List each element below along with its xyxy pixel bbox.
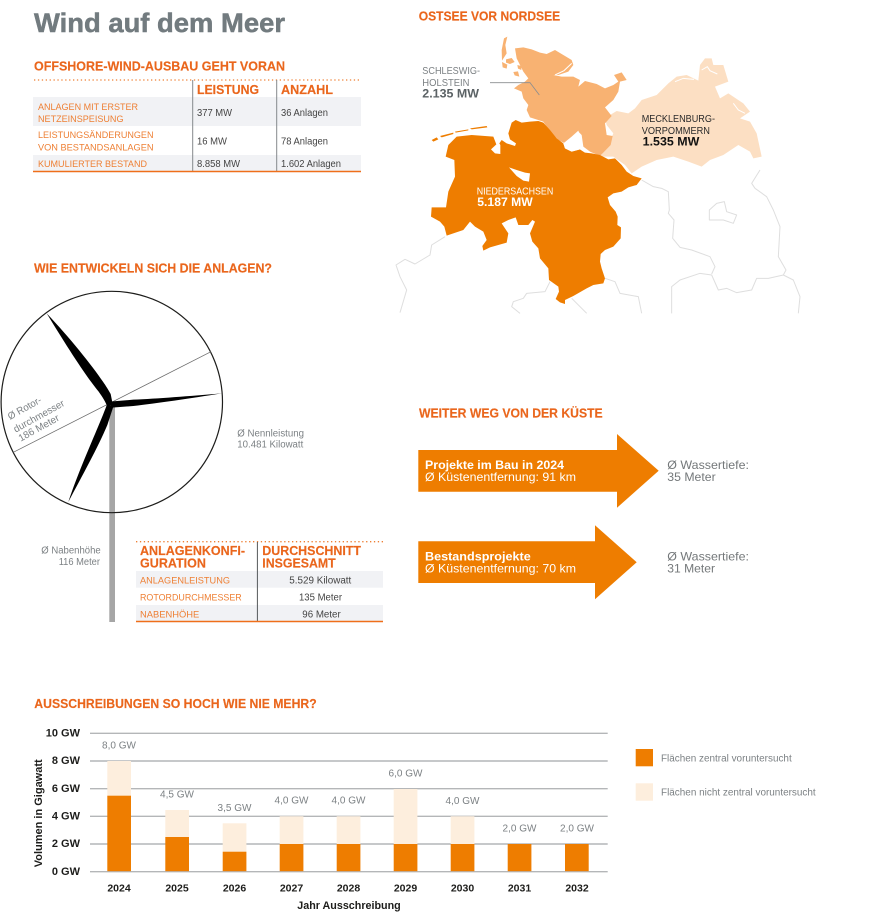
panel: map Ostsee vor Nordsee [396, 10, 800, 313]
bars: centrally pre-investigated [107, 796, 589, 871]
y axis labels: 0 GW [52, 866, 81, 878]
map: neighbouring state outlines [396, 170, 800, 313]
legend item: not centrally pre-investigated [636, 783, 816, 801]
map label: Niedersachsen [477, 187, 553, 209]
panel: tenders chart [33, 697, 816, 912]
map label: Schleswig-Holstein: HOLSTEIN [422, 78, 470, 89]
heading: distance from coast: WEITER WEG VON DER KÜSTE [419, 405, 603, 420]
bar value labels [102, 740, 595, 835]
label: rated power [237, 429, 304, 450]
map label: Schleswig-Holstein: SCHLESWIG- [422, 66, 480, 77]
table row: rotor diameter [140, 592, 343, 603]
label: water depth 35 m: Ø Wassertiefe: [667, 458, 749, 472]
table row: cumulative total: 1.602 Anlagen [281, 159, 341, 170]
heading: tenders: AUSSCHREIBUNGEN SO HOCH WIE NIE MEHR? [34, 697, 317, 711]
x axis years: 2030 [451, 883, 474, 895]
arrow: existing projects [418, 525, 637, 599]
label: water depth 35 m: 35 Meter [667, 470, 716, 484]
y axis labels: 10 GW [46, 728, 81, 740]
panel: turbine development [1, 262, 383, 622]
map label: Mecklenburg-Vorpommern: 1.535 MW [643, 135, 700, 149]
rotor circle [1, 291, 222, 513]
bar value labels: 4,0 GW [275, 796, 309, 807]
table row: plant capacity: 5.529 Kilowatt [289, 576, 352, 587]
label: hub height: 116 Meter [59, 557, 101, 568]
table row: rotor diameter: 135 Meter [299, 592, 343, 603]
map: Hamburg cut-out and Elbe [563, 131, 585, 153]
table row: first grid feed-in [38, 102, 328, 125]
bar value labels: 2,0 GW [560, 824, 595, 835]
x axis years: 2032 [565, 883, 589, 895]
table row: first grid feed-in: NETZEINSPEISUNG [38, 114, 124, 125]
label: rotor diameter [6, 395, 67, 444]
icon: wind turbine tower [109, 404, 115, 622]
table row: plant capacity [140, 576, 352, 587]
map: Schleswig-Holstein [490, 37, 627, 156]
table: plant configuration [136, 542, 383, 622]
table row: capacity changes: 78 Anlagen [281, 137, 328, 148]
heading: offshore expansion: OFFSHORE-WIND-AUSBAU GEHT VORAN [34, 60, 285, 74]
map label: Mecklenburg-Vorpommern: MECKLENBURG- [642, 114, 715, 125]
y axis labels: 6 GW [52, 783, 81, 795]
label: water depth 31 m: 31 Meter [667, 561, 715, 575]
label: rated power: Ø Nennleistung [237, 429, 304, 440]
bar value labels: 4,0 GW [446, 796, 480, 807]
label: hub height: Ø Nabenhöhe [41, 545, 101, 556]
label: hub height [41, 545, 101, 568]
table headers: INSGESAMT [262, 556, 336, 570]
bar value labels: 8,0 GW [102, 740, 137, 751]
y axis labels [46, 728, 81, 878]
label: rotor diameter: 186 Meter [17, 413, 62, 444]
map label: Mecklenburg-Vorpommern [642, 114, 715, 149]
arrow: existing projects: Ø Küstenentfernung: 70 km [425, 561, 576, 575]
label: rated power: 10.481 Kilowatt [237, 439, 304, 450]
x axis years: 2029 [394, 883, 417, 895]
table row: capacity changes: 16 MW [197, 137, 228, 148]
legend [636, 749, 816, 801]
panel: distance from coast [418, 405, 749, 599]
y axis labels: 2 GW [52, 838, 81, 850]
table headers: DURCHSCHNITT [262, 544, 361, 558]
heading: map: OSTSEE VOR NORDSEE [419, 10, 560, 24]
x axis years [107, 883, 589, 895]
table row: cumulative total [38, 159, 341, 170]
label: rotor diameter: durchmesser [12, 398, 67, 435]
panel: offshore expansion table [33, 60, 361, 172]
arrow: projects under construction: Ø Küstenentfernung: 91 km [425, 470, 576, 484]
map label: Mecklenburg-Vorpommern: VORPOMMERN [642, 126, 710, 137]
label: water depth 35 m [667, 458, 749, 484]
label: water depth 31 m [667, 549, 749, 575]
x axis years: 2028 [337, 883, 360, 895]
x axis years: 2026 [223, 883, 246, 895]
legend item: centrally pre-investigated: Flächen zentral voruntersucht [661, 753, 792, 764]
bars: not centrally pre-investigated [107, 761, 474, 852]
table row: plant capacity: ANLAGENLEISTUNG [140, 576, 230, 587]
map label: Schleswig-Holstein [422, 66, 480, 100]
x axis years: 2024 [107, 883, 131, 895]
bar value labels: 4,5 GW [160, 789, 195, 800]
map label: Niedersachsen: 5.187 MW [477, 195, 533, 209]
bar value labels: 6,0 GW [389, 769, 423, 780]
table headers [140, 544, 361, 570]
bar value labels: 3,5 GW [218, 803, 252, 814]
table column headers: ANZAHL [281, 83, 333, 97]
table row: cumulative total: KUMULIERTER BESTAND [38, 159, 147, 170]
table row: hub height [140, 609, 341, 620]
title: Wind auf dem Meer [34, 8, 285, 38]
table headers: ANLAGENKONFI- [140, 544, 245, 558]
table row: capacity changes: VON BESTANDSANLAGEN [38, 143, 154, 154]
table row: first grid feed-in: ANLAGEN MIT ERSTER [38, 102, 138, 113]
y axis labels: 4 GW [52, 810, 81, 822]
icon: turbine blades [47, 313, 222, 502]
table row: capacity changes: LEISTUNGSÄNDERUNGEN [38, 130, 154, 141]
arrow: projects under construction: Projekte im Bau in 2024 [425, 458, 564, 472]
map: Niedersachsen [431, 120, 642, 304]
arrow: projects under construction [418, 434, 659, 508]
table row: hub height: 96 Meter [302, 609, 341, 620]
arrow: existing projects: Bestandsprojekte [425, 549, 531, 563]
x axis title: Jahr Ausschreibung [297, 900, 401, 912]
bar value labels: 4,0 GW [332, 796, 366, 807]
x axis years: 2031 [508, 883, 531, 895]
table row: rotor diameter: ROTORDURCHMESSER [140, 592, 242, 603]
table headers: GURATION [140, 556, 206, 570]
map: Bremen cut-out [509, 167, 530, 182]
label: rotor diameter: Ø Rotor- [6, 395, 44, 423]
label: water depth 31 m: Ø Wassertiefe: [667, 549, 749, 563]
heading: turbine development: WIE ENTWICKELN SICH DIE ANLAGEN? [34, 262, 272, 276]
x axis years: 2027 [280, 883, 303, 895]
map label: Schleswig-Holstein: 2.135 MW [422, 86, 480, 100]
legend item: not centrally pre-investigated: Flächen nicht zentral voruntersucht [661, 787, 816, 798]
table row: capacity changes [38, 130, 328, 154]
table row: hub height: NABENHÖHE [140, 609, 199, 620]
rotor diameter line [13, 352, 211, 452]
table row: cumulative total: 8.858 MW [197, 159, 241, 170]
legend item: centrally pre-investigated [636, 749, 792, 766]
table column headers: LEISTUNG [197, 83, 259, 97]
map: Mecklenburg-Vorpommern [600, 58, 762, 173]
table row: first grid feed-in: 36 Anlagen [281, 108, 328, 119]
y axis labels: 8 GW [52, 755, 81, 767]
x axis years: 2025 [165, 883, 189, 895]
table column headers [197, 83, 333, 97]
table row: first grid feed-in: 377 MW [197, 108, 233, 119]
map label: Niedersachsen: NIEDERSACHSEN [477, 187, 553, 198]
bar chart [33, 728, 608, 912]
y axis title: Volumen in Gigawatt [33, 759, 45, 867]
bar value labels: 2,0 GW [503, 824, 537, 835]
